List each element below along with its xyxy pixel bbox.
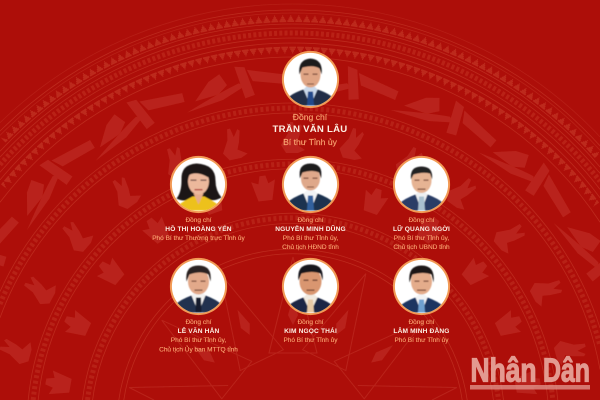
name block: Nguyễn Minh Dũng: Phó Bí thư Tỉnh ủy,	[283, 234, 338, 242]
name block: Hồ Thị Hoàng Yến: Đồng chí	[185, 215, 212, 224]
name block: Hồ Thị Hoàng Yến	[152, 215, 246, 242]
watermark: Nhân Dân logo	[470, 352, 590, 390]
name block: Lữ Quang Ngời: LỮ QUANG NGỜI	[393, 224, 450, 233]
name block: Nguyễn Minh Dũng	[275, 215, 346, 251]
portrait: Nguyễn Minh Dũng	[282, 156, 339, 213]
name block: Lữ Quang Ngời: Đồng chí	[408, 215, 435, 224]
name block: Trần Văn Lâu	[273, 112, 347, 147]
portrait: Lữ Quang Ngời	[393, 156, 450, 213]
name block: Kim Ngọc Thái: Đồng chí	[297, 317, 324, 326]
name block: Trần Văn Lâu: Đồng chí	[293, 112, 328, 122]
name block: Lê Văn Hẳn	[159, 317, 238, 354]
name block: Nguyễn Minh Dũng: Đồng chí	[297, 215, 324, 224]
portrait: Lê Văn Hẳn	[170, 258, 227, 315]
name block: Lâm Minh Đằng: LÂM MINH ĐẰNG	[393, 326, 450, 335]
name block: Lâm Minh Đằng: Đồng chí	[408, 317, 435, 326]
name block: Kim Ngọc Thái	[283, 317, 338, 344]
portrait: Hồ Thị Hoàng Yến	[170, 156, 227, 213]
name block: Lữ Quang Ngời: Chủ tịch UBND tỉnh	[393, 243, 450, 251]
name block: Nguyễn Minh Dũng: Chủ tịch HĐND tỉnh	[282, 243, 339, 251]
name block: Lê Văn Hẳn: Chủ tịch Ủy ban MTTQ tỉnh	[159, 344, 238, 354]
name block: Lê Văn Hẳn: Đồng chí	[185, 317, 212, 326]
name block: Trần Văn Lâu: TRẦN VĂN LÂU	[273, 123, 347, 135]
portrait: Lâm Minh Đằng	[393, 258, 450, 315]
portrait: Trần Văn Lâu	[282, 51, 339, 108]
watermark: Nhân Dân logo: Nhân	[470, 352, 536, 388]
name block: Kim Ngọc Thái: Phó Bí thư Tỉnh ủy	[283, 336, 338, 344]
name block: Lâm Minh Đằng: Phó Bí thư Tỉnh ủy	[394, 336, 449, 344]
portrait: Kim Ngọc Thái	[282, 258, 339, 315]
name block: Lê Văn Hẳn: LÊ VĂN HẲN	[178, 326, 219, 335]
name block: Hồ Thị Hoàng Yến: HỒ THỊ HOÀNG YẾN	[165, 223, 232, 233]
name block: Nguyễn Minh Dũng: NGUYỄN MINH DŨNG	[275, 224, 346, 233]
name block: Lữ Quang Ngời	[393, 215, 450, 251]
name block: Kim Ngọc Thái: KIM NGỌC THÁI	[284, 326, 337, 335]
name block: Hồ Thị Hoàng Yến: Phó Bí thư Thường trực Tỉnh ủy	[152, 234, 246, 242]
name block: Lữ Quang Ngời: Phó Bí thư Tỉnh ủy,	[394, 234, 449, 242]
name block: Lâm Minh Đằng	[393, 317, 450, 344]
name block: Lê Văn Hẳn: Phó Bí thư Tỉnh ủy,	[171, 336, 226, 344]
name block: Trần Văn Lâu: Bí thư Tỉnh ủy	[283, 137, 338, 147]
